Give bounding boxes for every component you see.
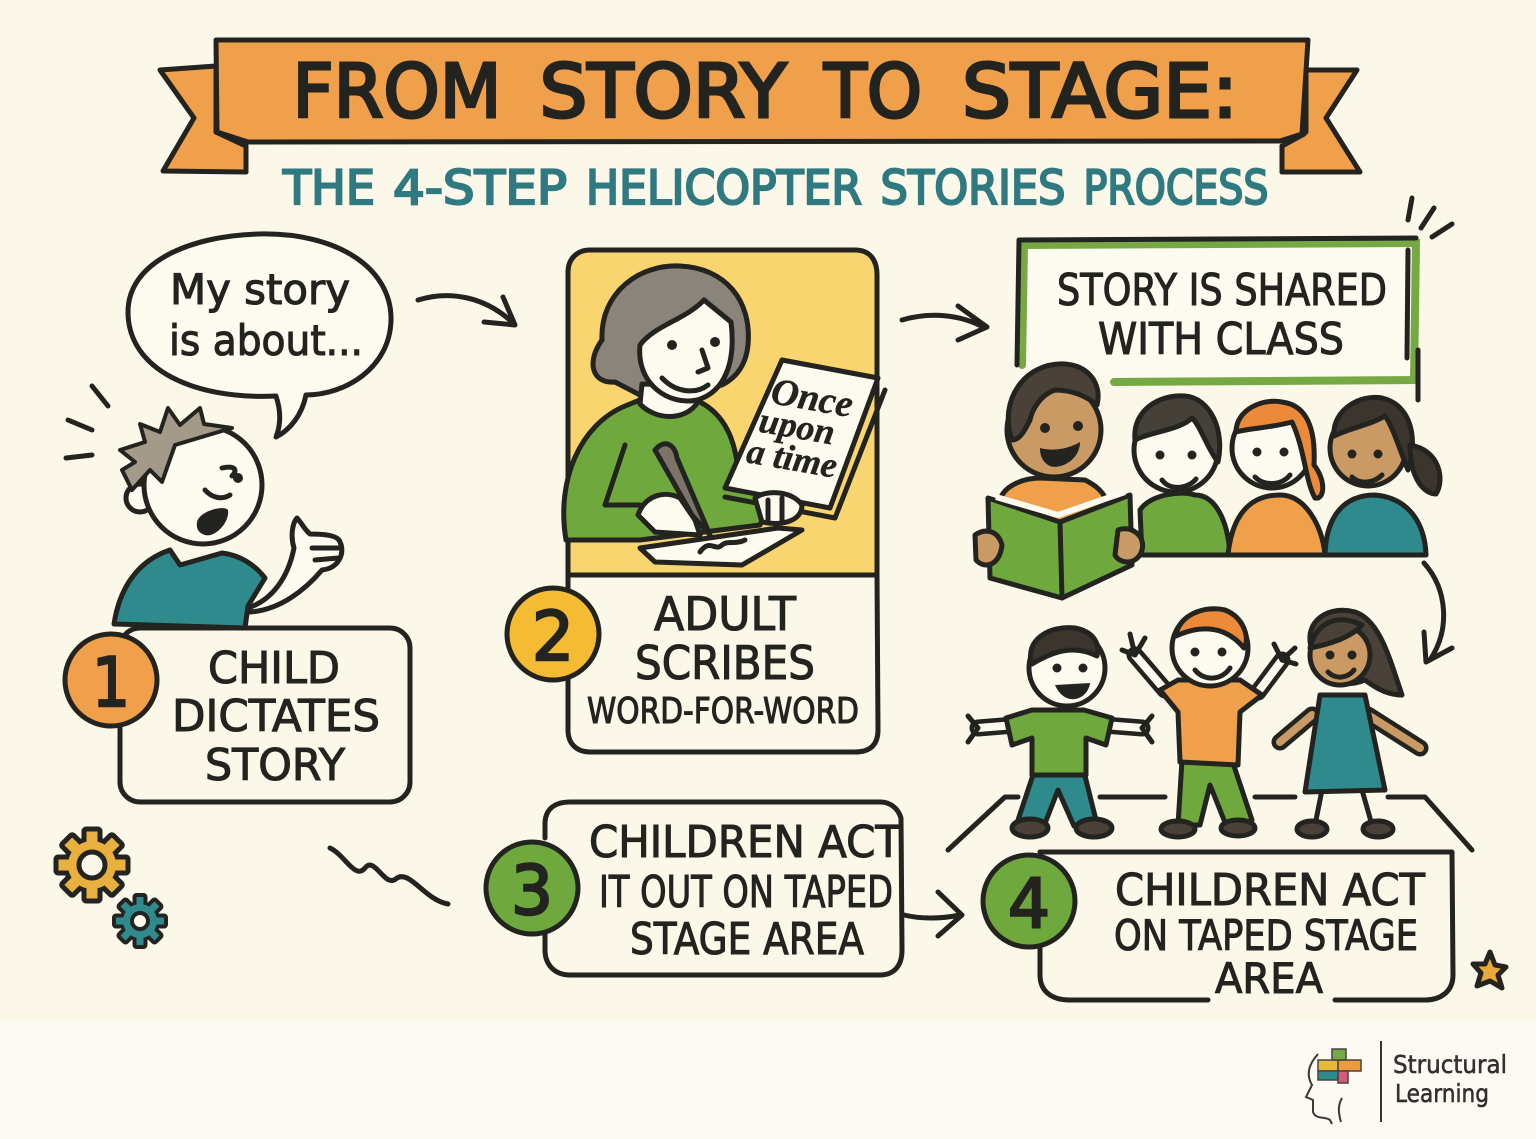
rays: attention xyxy=(1408,198,1452,237)
subtitle: PROCESS xyxy=(1084,161,1268,216)
step 4 label: CHILDREN ACT xyxy=(1115,865,1425,916)
step 4 badge: 4 xyxy=(1008,865,1050,944)
step 1 label: STORY xyxy=(205,740,345,791)
pen xyxy=(655,444,710,535)
step 2 label xyxy=(587,587,859,732)
title banner: STORY xyxy=(540,49,787,135)
step 1 badge: 1 xyxy=(92,644,130,723)
logo wordmark: Structural xyxy=(1393,1050,1507,1079)
step 3 label: STAGE AREA xyxy=(630,914,864,965)
speech bubble: my story is about: My story xyxy=(170,265,350,314)
reader xyxy=(1000,478,1108,540)
subtitle: STORIES xyxy=(880,161,1066,216)
step 1 badge xyxy=(65,634,157,726)
hair xyxy=(593,266,748,395)
child in green xyxy=(1140,493,1230,555)
panel: story is shared with class: STORY IS SHARED xyxy=(1057,265,1387,316)
panel: story is shared with class xyxy=(1017,238,1418,400)
step 3 box xyxy=(486,802,902,975)
step 2 badge xyxy=(507,588,599,680)
arrow: class to acting xyxy=(1424,563,1452,662)
subtitle: THE xyxy=(282,161,375,216)
logo: structural learning xyxy=(1306,1041,1507,1124)
child in orange xyxy=(1178,760,1252,830)
illustration: children acting on stage xyxy=(948,609,1472,850)
title banner xyxy=(160,40,1360,172)
step 3 label xyxy=(589,817,901,965)
speech bubble: my story is about xyxy=(128,234,391,437)
title banner: STAGE: xyxy=(962,49,1238,135)
arrow: bubble to step 2 xyxy=(418,296,515,325)
icon: head with blocks xyxy=(1306,1049,1361,1124)
illustration: adult writing xyxy=(564,266,885,565)
paper on table xyxy=(640,528,802,565)
subtitle: 4-STEP xyxy=(393,161,567,216)
step 3 label: IT OUT ON TAPED xyxy=(599,867,893,918)
logo wordmark xyxy=(1393,1050,1507,1108)
step 2 badge: 2 xyxy=(532,598,574,677)
step 1 box xyxy=(65,628,410,802)
subtitle: HELICOPTER xyxy=(586,161,862,216)
arm and hand xyxy=(248,518,342,612)
speech bubble: my story is about: is about... xyxy=(169,316,363,365)
step 4 label xyxy=(1114,865,1425,1003)
panel: story is shared with class: WITH CLASS xyxy=(1098,314,1344,365)
squiggle arrow xyxy=(330,848,448,904)
icon: star xyxy=(1473,952,1506,988)
subtitle xyxy=(282,161,1268,216)
arrow: step 3 to step 4 xyxy=(904,892,962,936)
step 2 label: ADULT xyxy=(654,587,797,641)
child in orange xyxy=(1228,495,1325,555)
panel: adult scribes xyxy=(507,250,885,752)
logo wordmark: Learning xyxy=(1395,1079,1489,1108)
step 1 label: CHILD xyxy=(208,643,340,694)
boy in green xyxy=(1018,772,1096,826)
shirt xyxy=(114,550,265,628)
book: once upon a time xyxy=(725,360,885,518)
illustration: child dictating xyxy=(66,386,342,628)
step 3 label: CHILDREN ACT xyxy=(589,817,901,868)
arrow: step 2 to share xyxy=(902,306,987,340)
step 1 label: DICTATES xyxy=(172,691,380,742)
sweater xyxy=(564,400,770,540)
step 2 label: SCRIBES xyxy=(635,636,815,690)
step 3 badge: 3 xyxy=(511,852,553,931)
hand xyxy=(638,494,700,535)
step 4 box xyxy=(983,852,1453,1003)
book: once upon a time: a time xyxy=(744,431,840,486)
title banner: FROM xyxy=(292,49,502,135)
illustration: class listening xyxy=(975,364,1440,598)
step 1 label xyxy=(172,643,380,791)
icon: orange gear xyxy=(56,829,128,901)
icon: teal gear xyxy=(114,895,166,947)
step 4 label: ON TAPED STAGE xyxy=(1114,911,1418,960)
step 4 label: AREA xyxy=(1215,954,1323,1003)
step 4 badge xyxy=(983,855,1075,947)
book: once upon a time: Once xyxy=(768,370,856,426)
step 3 badge xyxy=(486,842,578,934)
child in teal xyxy=(1325,495,1426,555)
open book xyxy=(975,492,1143,598)
child in teal dress xyxy=(1315,790,1372,825)
title banner: TO xyxy=(823,49,922,135)
book: once upon a time: upon xyxy=(756,400,838,452)
step 2 label: WORD-FOR-WORD xyxy=(587,691,859,732)
